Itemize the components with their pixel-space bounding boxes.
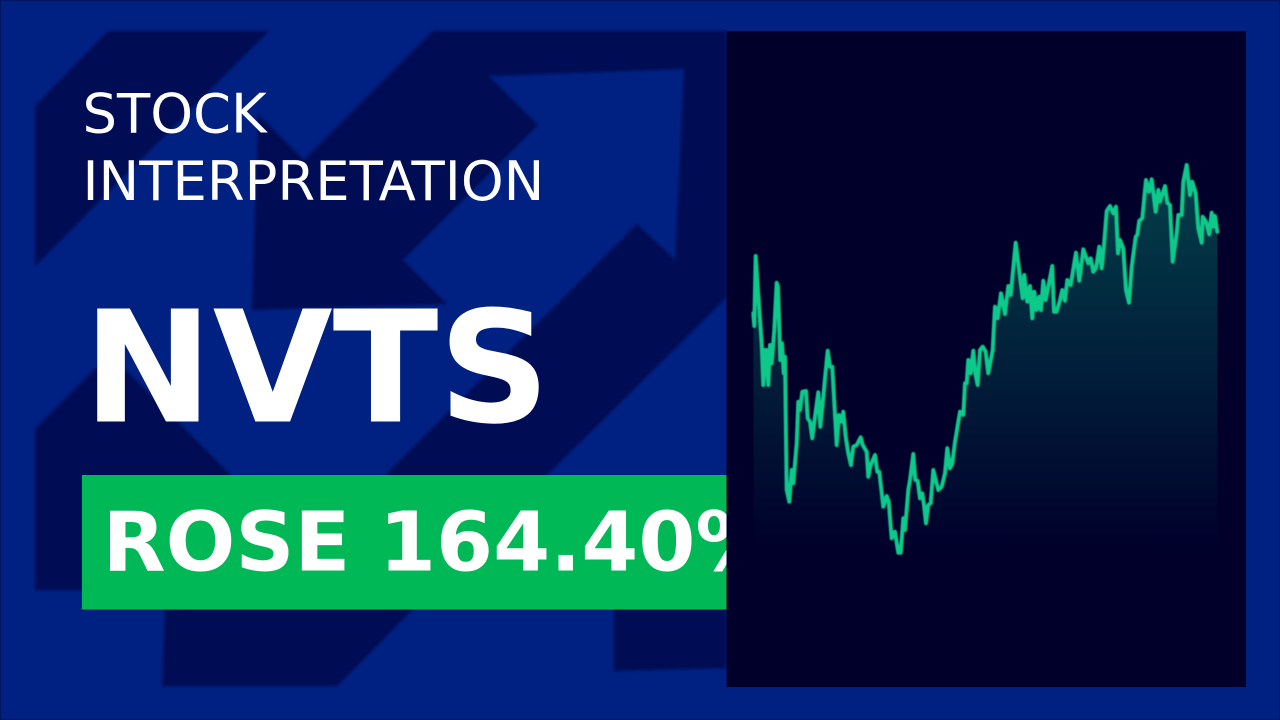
price line — [753, 165, 1217, 553]
ticker symbol: NVTS — [83, 278, 550, 458]
title: INTERPRETATION — [82, 150, 544, 213]
chart panel — [726, 31, 1246, 687]
green banner: ROSE 164.40% — [102, 496, 778, 591]
title — [82, 82, 544, 213]
green banner — [82, 475, 778, 610]
area under price line — [753, 165, 1217, 560]
title: STOCK — [82, 82, 268, 145]
background arrows — [35, 31, 726, 686]
